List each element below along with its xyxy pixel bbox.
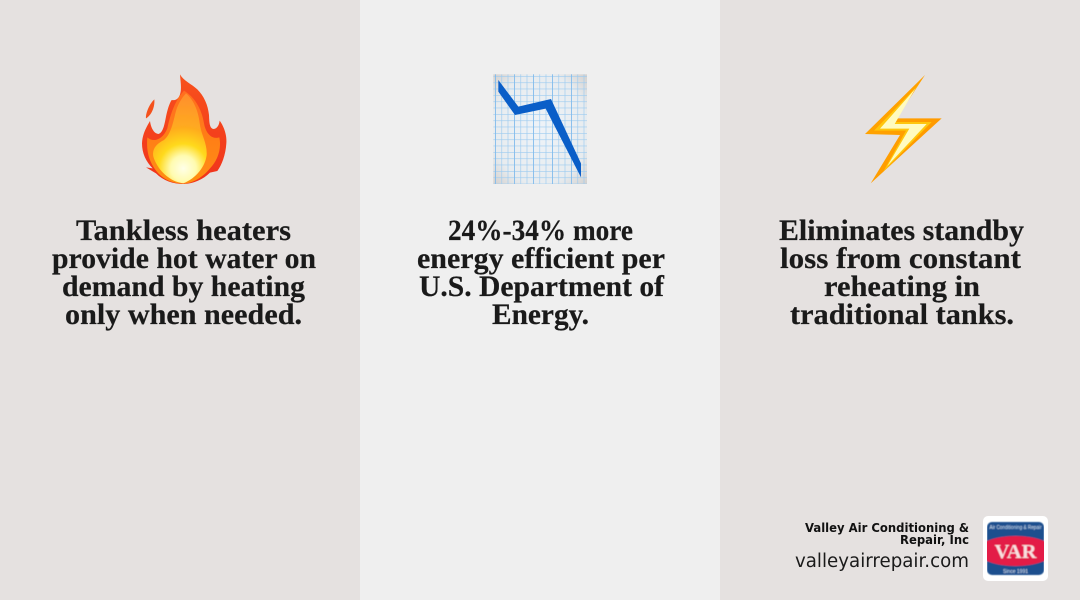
heading: center panel text: Energy.	[492, 298, 589, 331]
heading: left panel text: demand by heating	[62, 270, 305, 303]
footer: company name: Valley Air Conditioning &	[805, 520, 969, 535]
heading: left panel text: Tankless heaters	[76, 214, 291, 247]
panel: left background	[0, 0, 360, 600]
panel: right background	[720, 0, 1080, 600]
heading: right panel text: reheating in	[824, 270, 980, 303]
heading: left panel text	[52, 214, 316, 331]
heading: left panel text: provide hot water on	[52, 242, 316, 275]
heading: center panel text: U.S. Department of	[419, 270, 665, 303]
heading: right panel text: loss from constant	[780, 242, 1021, 275]
heading: center panel text: 24%-34% more	[448, 214, 633, 247]
icon: fire	[142, 74, 226, 184]
heading: right panel text	[779, 214, 1024, 331]
heading: right panel text: traditional tanks.	[790, 298, 1014, 331]
heading: center panel text	[417, 214, 665, 331]
footer: company name: Repair, Inc	[900, 532, 969, 547]
panel: center background	[360, 0, 720, 600]
logo: VAR badge: Since 1991	[1003, 569, 1028, 575]
logo: VAR badge: Air Conditioning & Repair	[990, 525, 1042, 531]
icon: lightning bolt	[865, 75, 942, 183]
heading: left panel text: only when needed.	[65, 298, 302, 331]
heading: center panel text: energy efficient per	[417, 242, 665, 275]
logo: VAR badge: VAR	[994, 541, 1037, 563]
logo: VAR badge	[983, 516, 1048, 581]
heading: right panel text: Eliminates standby	[779, 214, 1024, 247]
footer: company name	[805, 520, 969, 547]
footer: website: valleyairrepair.com	[795, 551, 969, 572]
icon: chart decreasing	[493, 74, 587, 184]
